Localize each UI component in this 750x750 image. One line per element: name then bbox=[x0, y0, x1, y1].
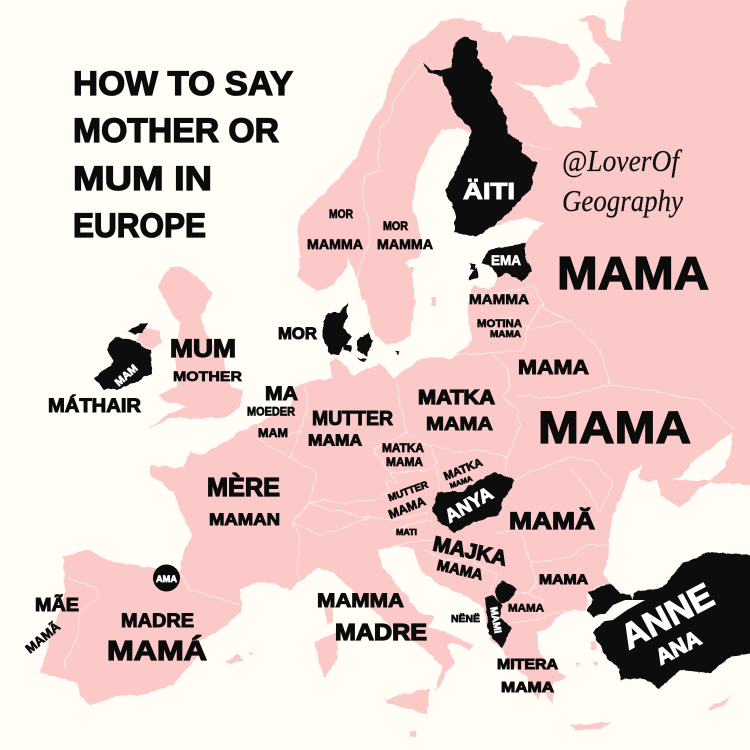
label: North Macedonia: MAMA bbox=[508, 602, 544, 614]
Sea of Azov bbox=[670, 432, 733, 480]
labels: Lithuania: MAMA bbox=[490, 329, 521, 340]
labels: Greece: MITERA bbox=[497, 656, 558, 673]
labels: Czechia: MATKA bbox=[382, 443, 424, 455]
labels: United Kingdom bbox=[170, 335, 242, 384]
labels: Turkey: ANA bbox=[651, 625, 705, 670]
labels: France: MAMAN bbox=[209, 510, 280, 529]
labels: United Kingdom: MUM bbox=[170, 335, 236, 363]
black country: Finland bbox=[423, 37, 537, 237]
label: Basque Country: AMA bbox=[156, 574, 178, 584]
labels: Sweden: MAMMA bbox=[377, 236, 433, 252]
black country: Kosovo bbox=[494, 580, 517, 603]
label: Slovenia: MATI bbox=[396, 528, 417, 537]
labels: Italy: MAMMA bbox=[317, 591, 404, 612]
label: Russia: MAMA bbox=[557, 247, 709, 299]
handle: Geography bbox=[562, 183, 683, 218]
Malta and Aegean islands bbox=[410, 641, 598, 737]
labels: Germany bbox=[308, 408, 394, 450]
labels: Lithuania bbox=[477, 318, 522, 340]
labels: Portugal bbox=[22, 594, 79, 656]
labels: France: MÈRE bbox=[207, 472, 280, 502]
labels: Portugal: MÃE bbox=[35, 594, 79, 615]
label: Belarus: MAMA bbox=[518, 357, 589, 379]
handle bbox=[562, 143, 683, 218]
label: Estonia: EMA bbox=[491, 252, 521, 268]
labels: United Kingdom: MOTHER bbox=[173, 368, 242, 384]
labels: Netherlands and Belgium: MOEDER bbox=[247, 406, 296, 418]
labels: Czechia: MAMA bbox=[386, 457, 423, 469]
labels: Turkey: ANNE bbox=[614, 576, 720, 657]
country borders bbox=[63, 62, 735, 668]
labels: Spain: MADRE bbox=[121, 611, 194, 632]
title: MOTHER OR bbox=[73, 112, 279, 150]
labels: Poland: MAMA bbox=[426, 414, 493, 434]
black circle: Basque Country bbox=[153, 564, 180, 592]
labels: Austria bbox=[386, 479, 431, 522]
handle: @LoverOf bbox=[562, 143, 683, 178]
Sardinia bbox=[315, 632, 338, 677]
labels: Czechia bbox=[382, 443, 424, 469]
Great Britain bbox=[147, 267, 243, 430]
labels: Sweden: MOR bbox=[383, 221, 409, 233]
black country: Albania bbox=[485, 595, 512, 648]
Balearic Islands bbox=[225, 652, 254, 664]
black countries bbox=[95, 37, 750, 688]
labels: Netherlands and Belgium: MAM bbox=[258, 428, 288, 440]
labels: Slovakia: MATKA bbox=[442, 457, 484, 483]
label: Hungary: ANYA bbox=[441, 483, 497, 528]
labels: Netherlands and Belgium: MA bbox=[265, 384, 298, 405]
black country: Hungary bbox=[432, 473, 515, 532]
title: HOW TO SAY bbox=[73, 65, 293, 103]
label: Bulgaria: MAMA bbox=[539, 571, 588, 587]
label: Romania: MAMĂ bbox=[509, 507, 595, 535]
title: EUROPE bbox=[73, 207, 206, 245]
labels: Spain: MAMÁ bbox=[107, 635, 207, 666]
Sea of Marmara bbox=[598, 600, 645, 622]
labels: Greece: MAMA bbox=[501, 679, 554, 696]
black country: Turkey bbox=[588, 552, 750, 688]
labels: Germany: MUTTER bbox=[312, 408, 394, 430]
labels: Greece bbox=[497, 656, 558, 696]
labels: Albania: NËNË bbox=[451, 612, 480, 625]
labels: Lithuania: MOTINA bbox=[477, 318, 522, 330]
black country: Denmark bbox=[323, 303, 400, 362]
labels: Germany: MAMA bbox=[308, 432, 362, 450]
label: Ukraine: MAMA bbox=[538, 402, 691, 453]
black country: Ireland bbox=[95, 323, 152, 390]
title bbox=[73, 65, 293, 245]
labels: Norway bbox=[307, 207, 363, 252]
labels: Albania bbox=[451, 606, 503, 634]
labels: Italy bbox=[317, 591, 427, 645]
labels: Austria: MUTTER bbox=[387, 479, 431, 504]
labels: Norway: MOR bbox=[329, 207, 353, 221]
label: Latvia: MAMMA bbox=[469, 291, 529, 307]
Northern Ireland bbox=[135, 328, 162, 350]
labels: Croatia and Bosnia: MAMA bbox=[435, 557, 485, 584]
labels: Poland: MATKA bbox=[418, 387, 495, 409]
label: Finland: ÄITI bbox=[463, 178, 515, 204]
labels: Austria: MAMA bbox=[386, 494, 428, 522]
Gotland bbox=[431, 297, 437, 306]
labels: Ireland: MAM bbox=[113, 362, 140, 389]
labels: Italy: MADRE bbox=[335, 619, 427, 645]
labels: Poland bbox=[418, 387, 495, 434]
labels: Croatia and Bosnia: MAJKA bbox=[431, 532, 509, 571]
Corsica bbox=[325, 602, 333, 625]
black country: Estonia bbox=[468, 243, 532, 282]
label: Denmark: MOR bbox=[278, 324, 317, 343]
title: MUM IN bbox=[73, 160, 212, 198]
labels: Slovakia: MAMA bbox=[449, 474, 474, 490]
labels: Spain bbox=[107, 611, 207, 666]
labels: Portugal: MAMÃ bbox=[22, 618, 63, 656]
Stockholm inlet bbox=[405, 257, 430, 267]
Sicily bbox=[385, 688, 430, 715]
labels: Albania: MAMI bbox=[487, 606, 503, 634]
labels: Ireland: MÁTHAIR bbox=[48, 395, 141, 417]
labels: France bbox=[207, 472, 280, 529]
labels: Ireland bbox=[48, 362, 141, 417]
labels: Norway: MAMMA bbox=[307, 236, 363, 252]
labels: Sweden bbox=[377, 221, 433, 252]
Cyprus bbox=[708, 695, 732, 710]
labels: Netherlands and Belgium bbox=[247, 384, 298, 440]
Crete bbox=[570, 722, 613, 730]
